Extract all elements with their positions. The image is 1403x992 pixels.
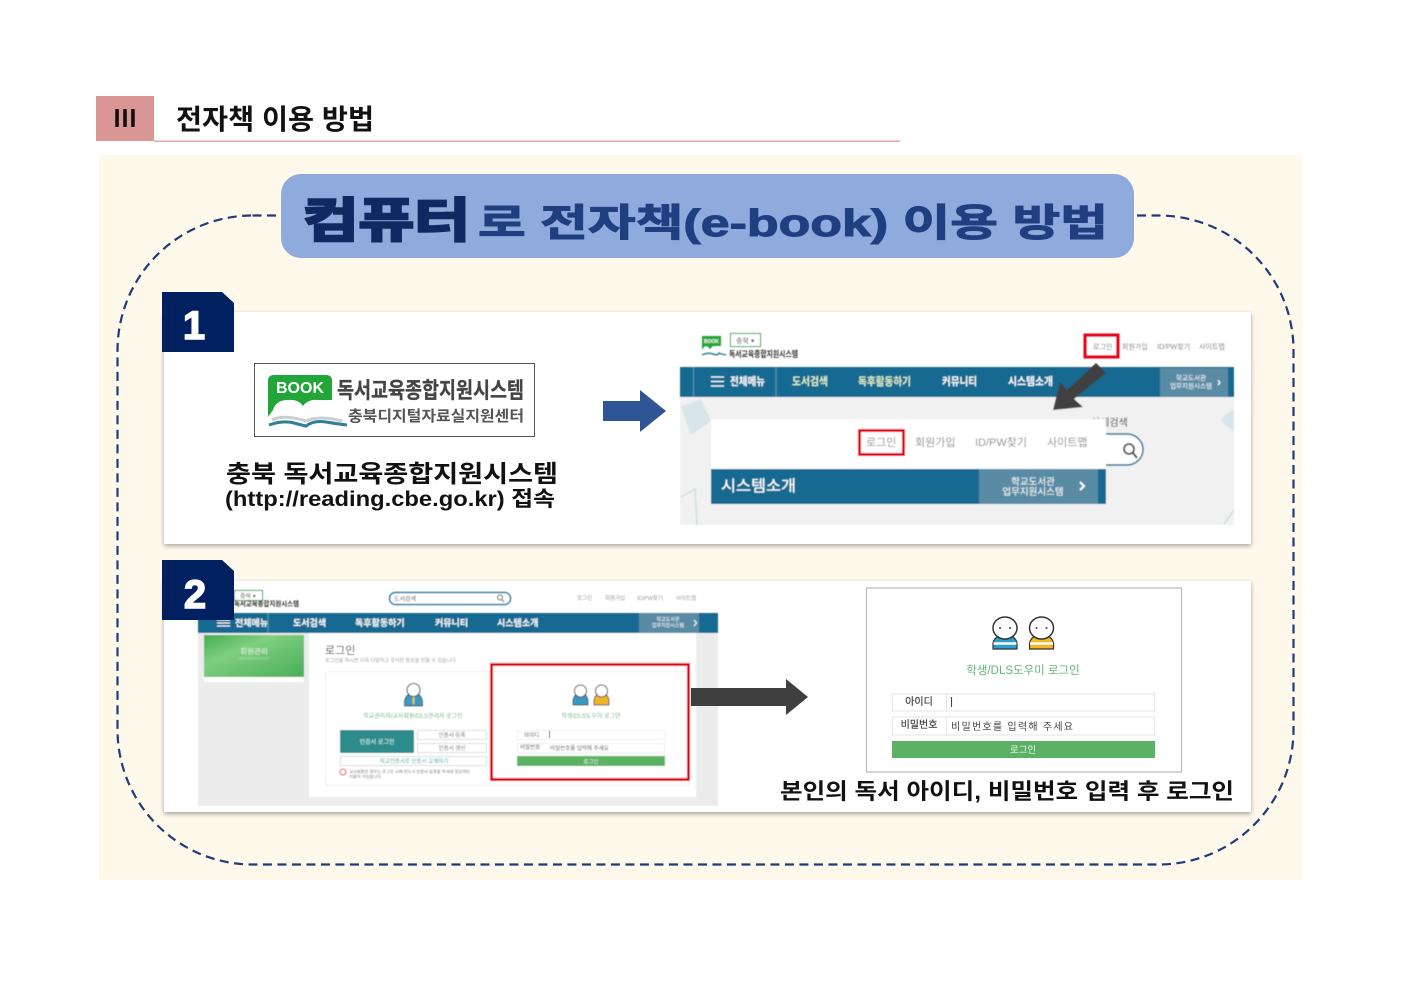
student login card small: 비밀번호를 입력해 주세요 xyxy=(550,744,609,752)
site logo: 충북 ▾ xyxy=(736,336,755,345)
login button: 로그인 xyxy=(1010,745,1036,756)
site navigation bar: 커뮤니티 xyxy=(435,617,468,628)
site navigation bar: 독후활동하기 xyxy=(355,617,405,628)
arrow: dark right xyxy=(691,679,808,715)
step 2 badge xyxy=(162,560,234,620)
site navigation bar: 업무지원시스템 xyxy=(652,622,684,629)
section header xyxy=(96,96,900,142)
red highlight box xyxy=(492,664,688,780)
site logo xyxy=(702,334,798,359)
enlarged search fragment xyxy=(1091,417,1143,465)
site header: 충북 ▾ xyxy=(240,592,256,600)
teacher login card: 인증서 등록 xyxy=(439,731,465,739)
logo box: 독서교육종합지원시스템 xyxy=(337,378,524,403)
site navigation bar: 학교도서관 xyxy=(656,616,680,623)
site header: ID/PW찾기 xyxy=(637,594,663,602)
teacher login card: 학교인증서로 인증서 교체하기 xyxy=(380,757,448,765)
enlarged login card: ID/PW찾기 xyxy=(975,436,1027,449)
site navigation bar: › xyxy=(1217,375,1221,389)
logo box: BOOK xyxy=(276,380,325,397)
website screenshot 2 xyxy=(198,590,718,806)
site logo: 독서교육종합지원시스템 xyxy=(729,349,798,359)
site header: 로그인 xyxy=(577,595,592,602)
membership sidebar banner xyxy=(204,635,304,682)
main title: remainder: 로 전자책(e-book) 이용 방법 xyxy=(478,203,1108,245)
site navigation bar xyxy=(680,367,1234,397)
step 2 badge: 2 xyxy=(184,573,206,617)
student login card small: 비밀번호 xyxy=(520,743,540,751)
site top links: 사이트맵 xyxy=(1199,342,1225,351)
site header: 사이트맵 xyxy=(676,594,696,602)
main title: computer: 컴퓨터 xyxy=(303,194,470,247)
ID field: 아이디 xyxy=(905,696,933,708)
logo box: 충북디지털자료실지원센터 xyxy=(348,408,524,425)
password field xyxy=(892,717,1154,735)
site navigation bar: 도서검색 xyxy=(293,617,326,628)
section number badge: Ⅲ xyxy=(113,99,137,134)
step 1 badge xyxy=(162,292,234,352)
password field: 비밀번호 xyxy=(901,719,937,731)
site navigation bar xyxy=(198,613,718,633)
site navigation bar: 학교도서관 xyxy=(1176,373,1206,382)
site top links: ID/PW찾기 xyxy=(1157,342,1190,351)
student login card small xyxy=(517,685,665,766)
password field: 비밀번호를 입력해 주세요 xyxy=(951,720,1073,733)
panel: step 1 xyxy=(162,292,1251,544)
main title pill xyxy=(281,174,1134,258)
enlarged student login xyxy=(866,588,1182,772)
site header: 회원가입 xyxy=(605,594,625,602)
arrow: blue right xyxy=(603,390,666,432)
student login card small: 로그인 xyxy=(583,758,599,766)
login heading xyxy=(325,644,457,664)
dashed outline frame xyxy=(118,216,1294,864)
membership sidebar banner: MEMBERSHIP xyxy=(239,656,269,661)
student login card small: 아이디 xyxy=(524,731,539,739)
enlarged login card: 사이트맵 xyxy=(1047,436,1087,449)
enlarged login card: 업무지원시스템 xyxy=(1002,486,1064,498)
enlarged login card: 시스템소개 xyxy=(721,477,796,495)
teacher login card xyxy=(326,672,690,786)
teacher login card: 학교관리자/교사회원/DLS관리자 로그인 xyxy=(363,712,463,720)
arrow: dark diagonal xyxy=(1053,363,1106,410)
site logo: BOOK xyxy=(704,339,719,345)
login heading: 로그인을 하시면 더욱 다양하고 유익한 정보를 만들 수 있습니다. xyxy=(325,657,457,664)
site top links xyxy=(1093,342,1225,351)
step 2 caption: 본인의 독서 아이디, 비밀번호 입력 후 로그인 xyxy=(780,779,1234,804)
site top links: 로그인 xyxy=(1093,342,1112,351)
site header xyxy=(234,590,696,608)
ID field xyxy=(892,694,1154,711)
student icons xyxy=(993,617,1054,649)
enlarged login card: 학교도서관 xyxy=(1011,477,1055,488)
teacher login card: 인증서 갱신 xyxy=(439,744,465,752)
site navigation bar: 전체메뉴 xyxy=(235,617,268,628)
teacher login card: 인증서 로그인 xyxy=(360,738,394,746)
step 1 caption xyxy=(225,461,558,511)
site navigation bar: 도서검색 xyxy=(792,375,828,388)
membership sidebar banner: 회원관리 xyxy=(240,646,268,656)
teacher login card: 이용이 가능합니다. xyxy=(349,773,382,780)
login button xyxy=(892,741,1155,758)
red highlight top login xyxy=(1085,335,1118,357)
step 1 badge: 1 xyxy=(183,304,205,348)
site navigation bar: 독후활동하기 xyxy=(858,374,911,388)
site header: 도서검색 xyxy=(394,595,416,603)
enlarged student login: 학생/DLS도우미 로그인 xyxy=(966,664,1080,677)
site navigation bar: 시스템소개 xyxy=(497,617,538,628)
step 1 caption: 충북 독서교육종합지원시스템 xyxy=(226,461,558,488)
logo box xyxy=(254,364,534,436)
section number badge xyxy=(96,96,154,141)
enlarged login card xyxy=(711,419,1106,504)
cream background panel xyxy=(99,155,1303,880)
site navigation bar: 업무지원시스템 xyxy=(1170,381,1212,390)
login heading: 로그인 xyxy=(325,644,355,657)
website screenshot 1 xyxy=(680,334,1234,525)
section title: 전자책 이용 방법 xyxy=(176,104,374,135)
step 1 caption: (http://reading.cbe.go.kr) 접속 xyxy=(225,488,555,511)
enlarged login card: 로그인 xyxy=(866,436,896,449)
site navigation bar: 커뮤니티 xyxy=(942,375,977,388)
teacher login card: 교사회원인 경우는 로그인 시에 반드시 인증서 등록을 하셔야 정상적인 xyxy=(349,768,470,775)
site navigation bar: 시스템소개 xyxy=(1008,375,1053,388)
site navigation bar: 전체메뉴 xyxy=(730,374,765,388)
panel: step 2 xyxy=(162,560,1251,812)
enlarged search fragment: 상세검색 xyxy=(1091,417,1128,429)
student login card small: 학생/DLS도우미 로그인 xyxy=(561,712,621,720)
site top links: 회원가입 xyxy=(1122,342,1148,351)
enlarged login card: 회원가입 xyxy=(915,436,955,449)
site header: 독서교육종합지원시스템 xyxy=(234,599,299,608)
